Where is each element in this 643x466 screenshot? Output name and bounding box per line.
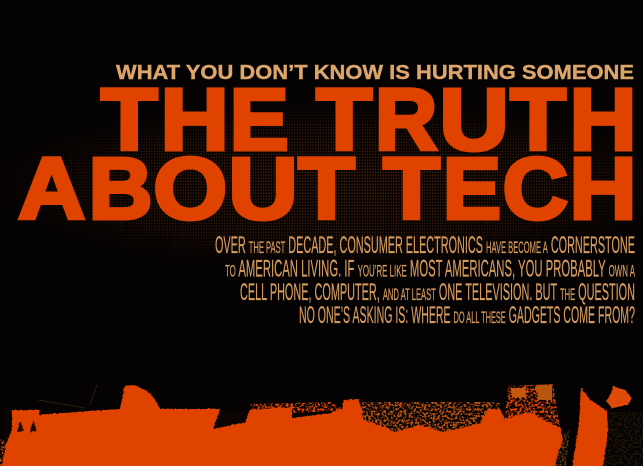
title: E	[230, 71, 289, 169]
title: H	[161, 72, 229, 169]
title: A	[18, 141, 85, 238]
title	[18, 71, 636, 238]
title: T	[316, 71, 372, 168]
title: T	[383, 141, 440, 238]
subtitle: WHAT YOU DON’T KNOW IS HURTING SOMEONE	[116, 62, 634, 84]
title: U	[440, 72, 509, 169]
title: B	[89, 140, 153, 238]
paint stroke	[0, 384, 643, 466]
title: T	[298, 141, 355, 238]
intro paragraph	[215, 232, 635, 329]
title: U	[228, 141, 298, 238]
title: R	[375, 72, 437, 169]
title: H	[570, 72, 636, 169]
title: O	[153, 141, 227, 238]
title: E	[443, 141, 501, 238]
title: C	[503, 140, 568, 237]
title: H	[570, 141, 636, 238]
title: T	[510, 71, 566, 168]
title: T	[101, 72, 157, 169]
